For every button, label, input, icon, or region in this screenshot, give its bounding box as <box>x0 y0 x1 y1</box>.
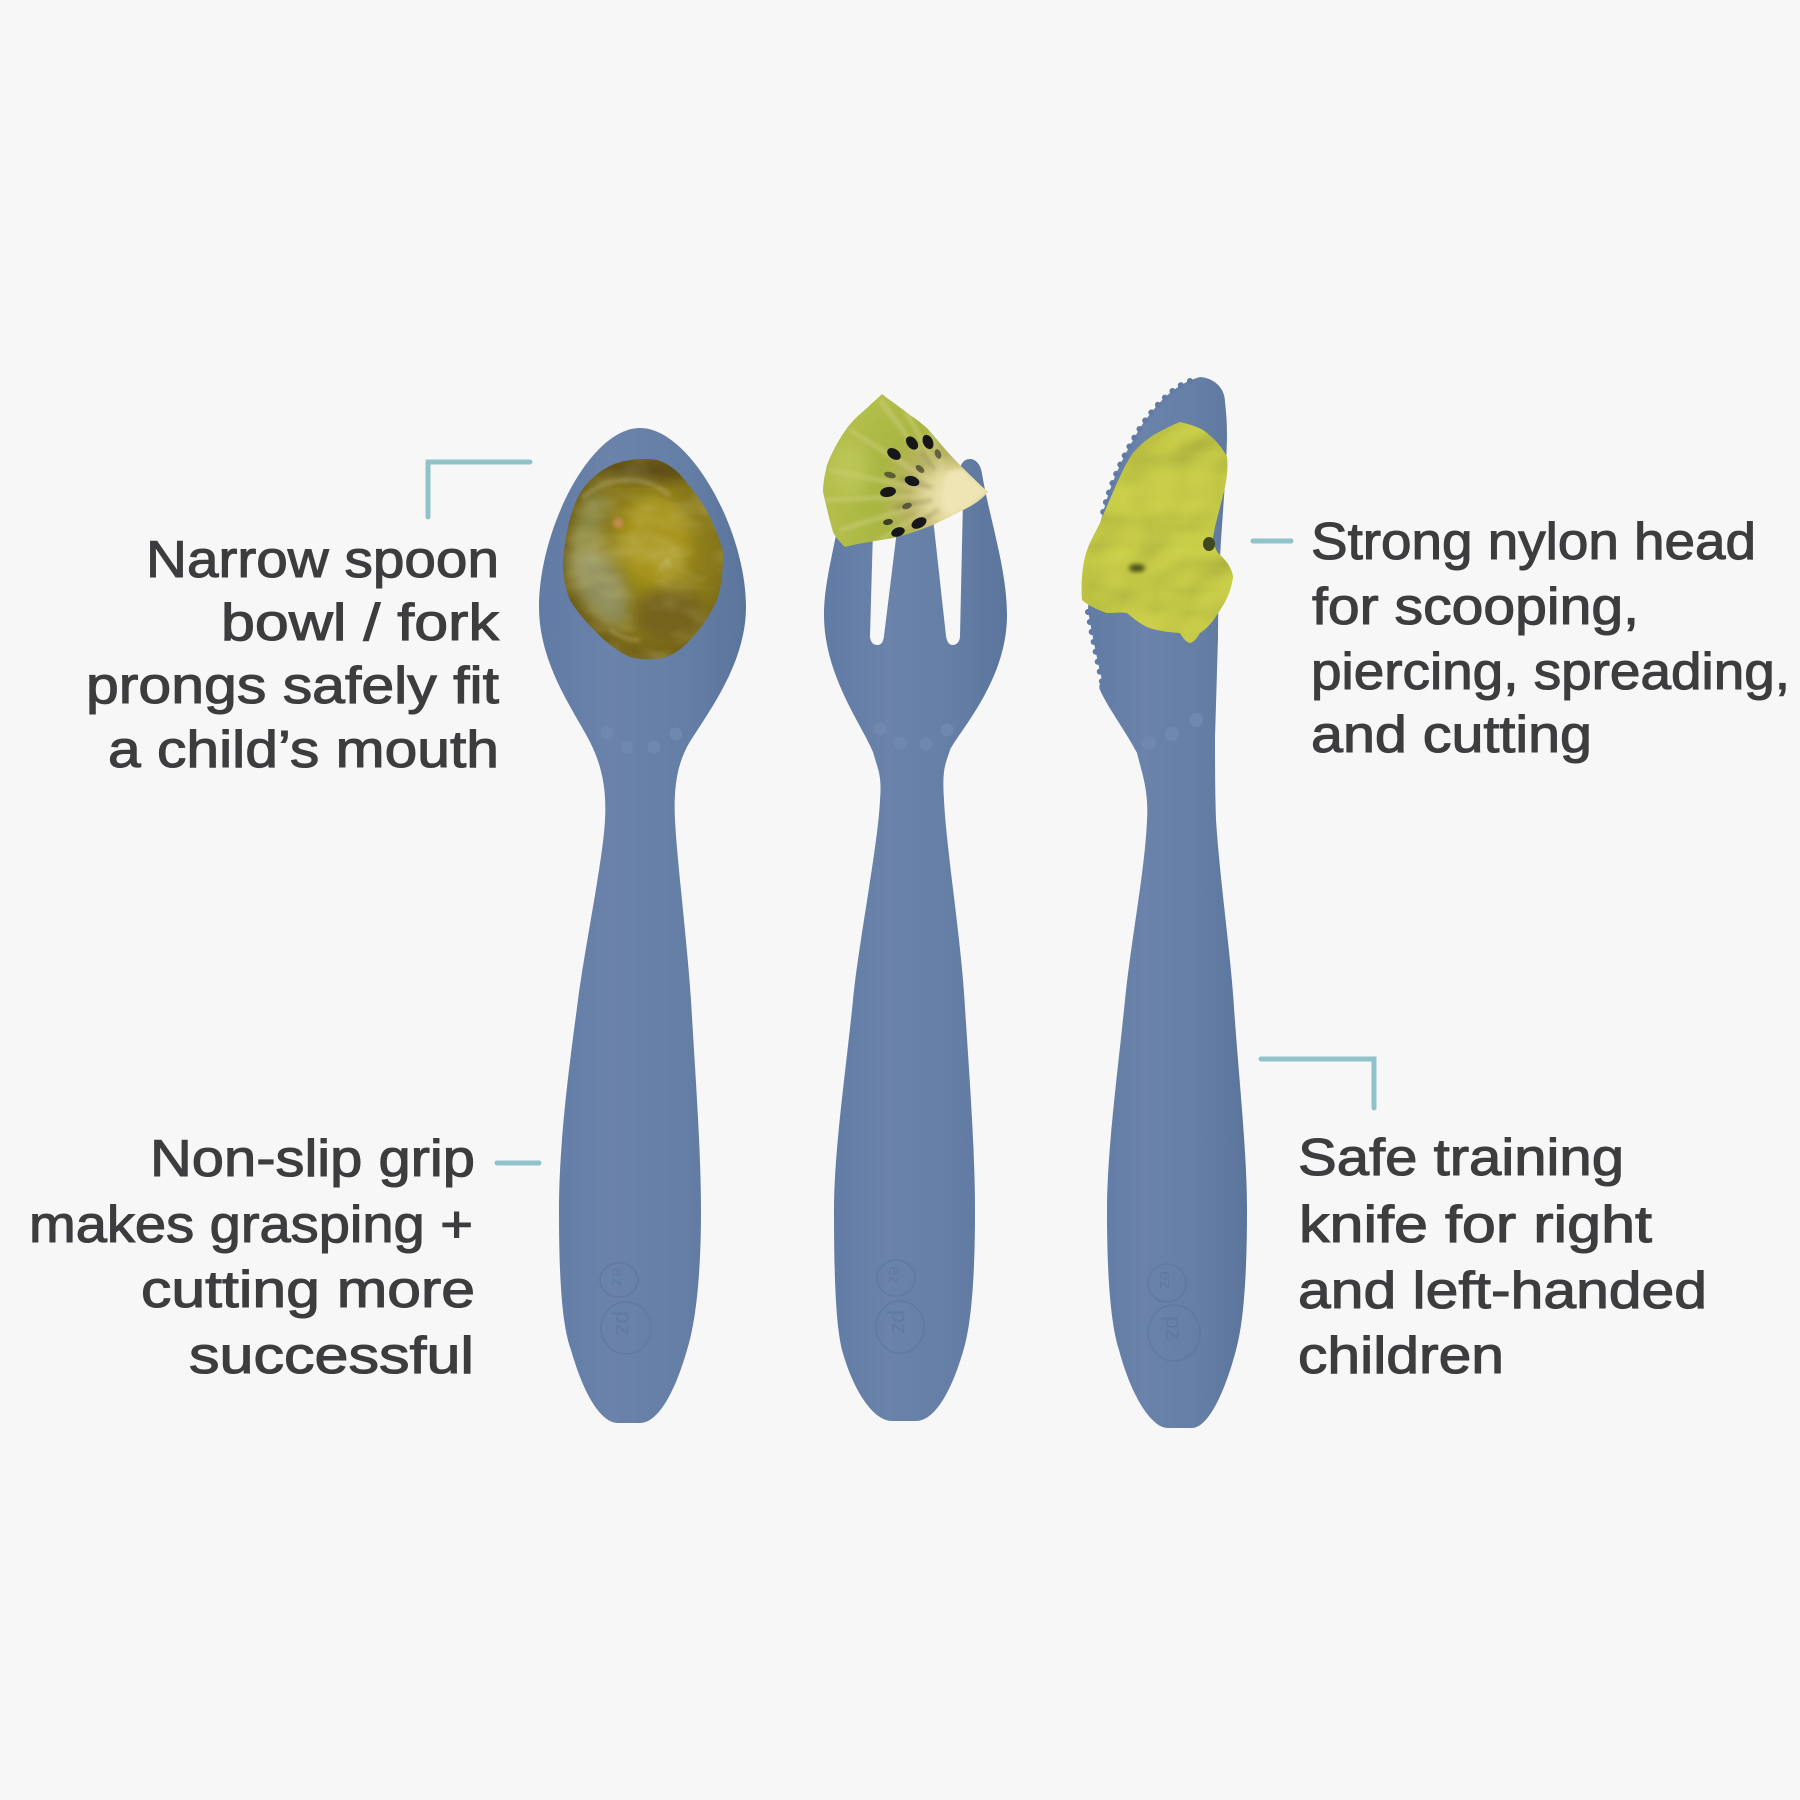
text block: strong nylon head: piercing, spreading, <box>1311 643 1790 701</box>
text block: safe training knife: children <box>1298 1327 1504 1385</box>
text block: strong nylon head: Strong nylon head <box>1311 513 1756 571</box>
text block: narrow spoon: a child’s mouth <box>108 721 499 779</box>
knife embossed logo <box>1148 1264 1200 1361</box>
text block: non-slip grip: Non-slip grip <box>150 1130 475 1188</box>
fork body <box>824 459 1007 1421</box>
spoon puree <box>563 459 723 660</box>
spoon embossed logo: ez <box>608 1268 627 1286</box>
text block: strong nylon head <box>1311 513 1790 764</box>
text block: non-slip grip: makes grasping + <box>29 1196 473 1254</box>
kiwi slice <box>823 394 988 547</box>
fork embossed logo <box>876 1260 924 1353</box>
text block: narrow spoon <box>86 531 500 779</box>
text block: narrow spoon: prongs safely fit <box>86 657 500 715</box>
knife embossed logo: pz <box>1161 1316 1187 1340</box>
text block: non-slip grip <box>29 1130 475 1385</box>
avocado spread <box>1082 422 1233 643</box>
fork grip dots <box>874 722 954 750</box>
knife embossed logo: ez <box>1156 1271 1175 1289</box>
leader: nylon head <box>1253 538 1291 544</box>
text block: narrow spoon: Narrow spoon <box>146 531 499 589</box>
text block: safe training knife: Safe training <box>1298 1129 1624 1187</box>
text block: strong nylon head: and cutting <box>1311 706 1592 764</box>
text block: safe training knife: and left-handed <box>1298 1262 1707 1320</box>
spoon body <box>539 428 746 1423</box>
leader: training knife <box>1261 1059 1374 1108</box>
infographic canvas <box>32 377 1786 1428</box>
text block: safe training knife <box>1298 1129 1707 1385</box>
panel: knife <box>1075 377 1247 1428</box>
spoon embossed logo: pz <box>611 1311 637 1335</box>
leader: grip <box>497 1160 539 1166</box>
leader: spoon bowl <box>428 462 530 517</box>
knife body <box>1088 377 1247 1428</box>
knife serrations <box>1088 381 1190 682</box>
text block: strong nylon head: for scooping, <box>1312 578 1639 636</box>
text block: narrow spoon: bowl / fork <box>221 594 500 652</box>
spoon grip dots <box>600 726 682 754</box>
fork embossed logo: ez <box>885 1266 904 1284</box>
text block: non-slip grip: successful <box>189 1327 474 1385</box>
panel: spoon <box>539 428 746 1423</box>
spoon embossed logo <box>600 1263 651 1354</box>
fork embossed logo: pz <box>887 1310 913 1334</box>
knife grip dots <box>1142 713 1203 750</box>
avocado speck <box>1203 537 1215 551</box>
text block: safe training knife: knife for right <box>1299 1196 1653 1254</box>
panel: fork <box>815 385 1007 1421</box>
text block: non-slip grip: cutting more <box>141 1261 475 1319</box>
